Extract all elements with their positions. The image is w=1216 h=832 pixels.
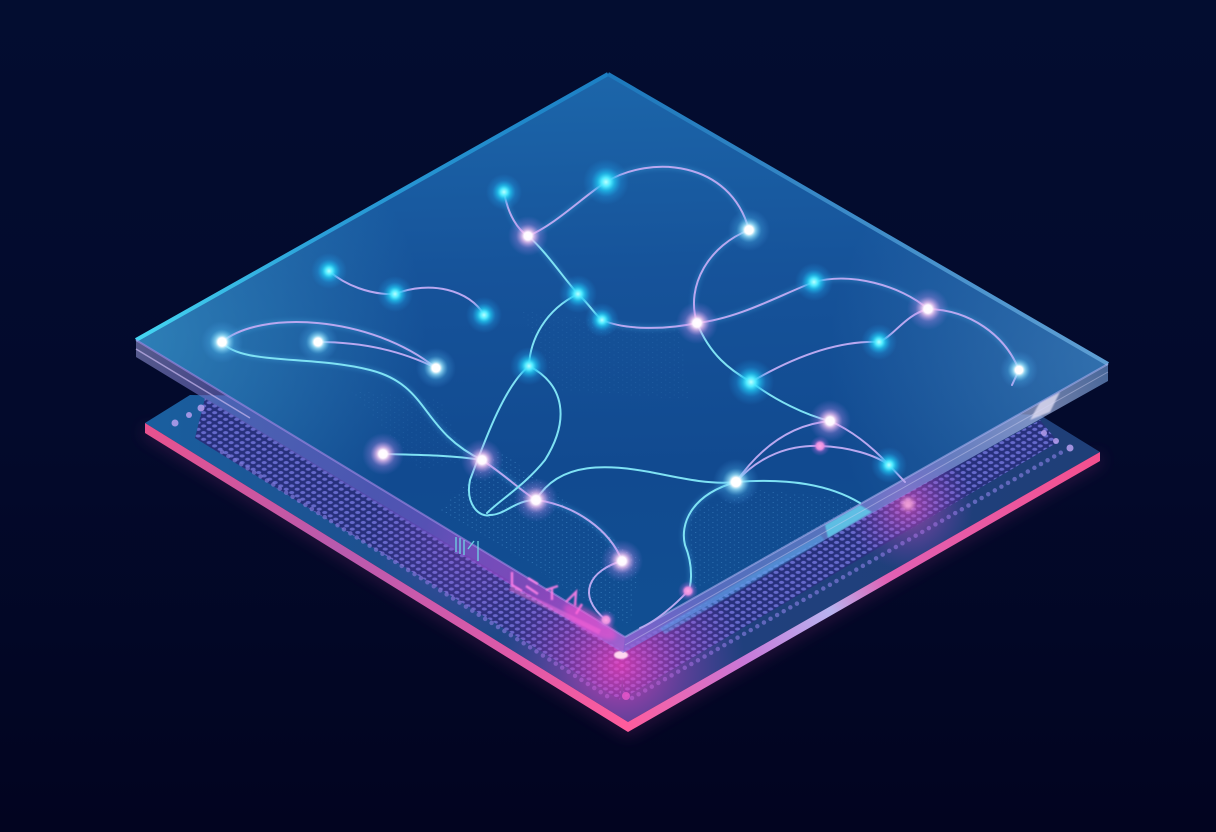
board glow bbox=[145, 430, 1100, 730]
pink glow on pads bbox=[145, 395, 1100, 722]
board top surface bbox=[145, 395, 1100, 722]
speckled circuit texture bbox=[350, 310, 860, 625]
outer pad row, right bbox=[632, 452, 1062, 698]
pink glow left bbox=[145, 395, 1100, 722]
pink corner bloom bbox=[559, 598, 621, 646]
glow under traces bbox=[222, 167, 1019, 591]
left corner sheen bbox=[136, 74, 1108, 637]
node row: lower bbox=[362, 433, 907, 630]
top-left edge bbox=[136, 74, 608, 340]
plate top face bbox=[136, 74, 1108, 637]
board left side edge bbox=[145, 423, 628, 732]
lower-right inner edge bbox=[625, 364, 1108, 637]
contact pad array, right bbox=[620, 420, 1058, 698]
node row: upper bbox=[311, 159, 949, 360]
right corner sheen bbox=[136, 74, 1108, 637]
etched mark, cyan bbox=[456, 537, 478, 561]
glass plate bbox=[136, 74, 1108, 653]
network traces, lavender bbox=[222, 167, 1019, 628]
lower circuit board bbox=[145, 395, 1100, 732]
glowing hot spot bottom bbox=[614, 651, 628, 659]
outer pad row, left bbox=[222, 452, 610, 698]
corner pads bbox=[172, 404, 1074, 700]
glowing hot spot bbox=[902, 498, 914, 510]
top-right edge bbox=[608, 74, 1108, 364]
network traces, cyan bbox=[222, 236, 860, 591]
pink glow right bbox=[145, 395, 1100, 722]
plate side highlights bbox=[136, 349, 1108, 645]
lower-left inner edge bbox=[136, 340, 625, 637]
etched mark, pink bbox=[510, 572, 600, 632]
network nodes bbox=[201, 159, 1038, 630]
plate left side bbox=[136, 340, 625, 653]
board right side edge bbox=[628, 452, 1100, 732]
dark pad bed, left bbox=[195, 398, 625, 700]
plate right side bbox=[623, 364, 1108, 653]
dark pad bed, right bbox=[620, 420, 1058, 698]
contact pad array, left bbox=[195, 398, 625, 700]
node row: middle bbox=[201, 321, 1038, 442]
